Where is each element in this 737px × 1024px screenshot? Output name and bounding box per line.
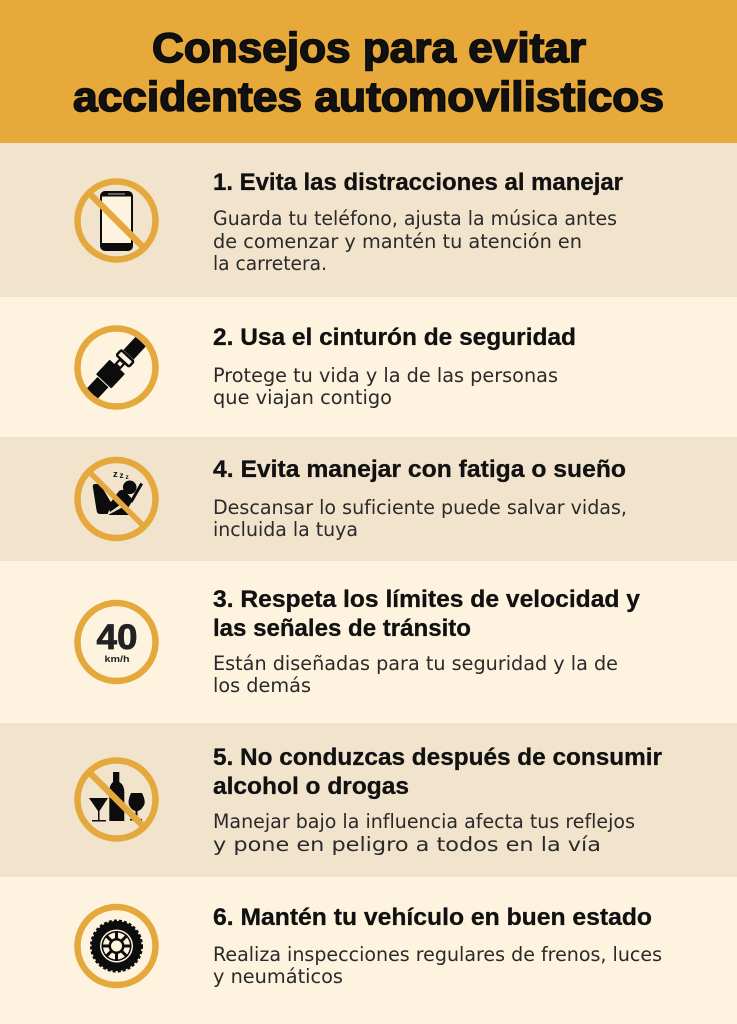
text: tip 3 body: Están diseñadas para tu seguridad y la de xyxy=(213,652,618,675)
text: tip 1 body: Guarda tu teléfono, ajusta la música antes xyxy=(213,207,617,230)
icon: tire xyxy=(78,907,156,985)
text: tip 5 body xyxy=(213,810,635,856)
text: tip 5 body: y pone en peligro a todos en la vía xyxy=(213,833,601,856)
text: tip 4 body: incluida la tuya xyxy=(213,518,358,541)
text: tip 2 body: que viajan contigo xyxy=(213,386,392,409)
icon: drowsy driver xyxy=(78,460,156,538)
text: tip 6 body: Realiza inspecciones regulares de frenos, luces xyxy=(213,943,662,966)
text: tip 4 body xyxy=(213,496,627,541)
heading: tip 5: alcohol o drogas xyxy=(213,773,409,800)
panel: tip 4 fatigue xyxy=(0,437,737,561)
heading: tip 4: 4. Evita manejar con fatiga o sueño xyxy=(213,456,626,483)
icon: drowsy driver: z xyxy=(126,474,130,481)
text: tip 6 body xyxy=(213,943,662,988)
icon: no phone xyxy=(78,182,156,260)
icon: no alcohol xyxy=(78,760,156,838)
panel: tip 3 speed limits xyxy=(0,561,737,723)
heading: tip 6: 6. Mantén tu vehículo en buen estado xyxy=(213,904,652,931)
icon: speed limit 40 xyxy=(78,603,156,681)
text: tip 1 body: la carretera. xyxy=(213,252,327,275)
heading: tip 5 xyxy=(213,744,662,800)
heading: tip 1: 1. Evita las distracciones al manejar xyxy=(213,169,623,196)
title banner: accidentes automovilisticos xyxy=(73,73,664,120)
heading: tip 3 xyxy=(213,586,641,642)
heading: tip 3: 3. Respeta los límites de velocidad y xyxy=(213,586,641,613)
icon: speed limit 40: 40 xyxy=(96,618,138,657)
heading: tip 2: 2. Usa el cinturón de seguridad xyxy=(213,324,576,351)
heading: tip 5: 5. No conduzcas después de consumir xyxy=(213,744,662,771)
panel: tip 2 seat belt xyxy=(0,297,737,437)
panel: tip 5 alcohol xyxy=(0,723,737,877)
panel: tip 6 vehicle maintenance xyxy=(0,877,737,1024)
icon: drowsy driver: z xyxy=(120,471,124,480)
icon: drowsy driver: z xyxy=(113,469,118,480)
icon: speed limit 40: km/h xyxy=(104,654,130,665)
text: tip 2 body: Protege tu vida y la de las personas xyxy=(213,364,558,387)
text: tip 1 body xyxy=(213,207,617,275)
text: tip 5 body: Manejar bajo la influencia afecta tus reflejos xyxy=(213,810,635,833)
title banner xyxy=(0,0,737,143)
heading: tip 3: las señales de tránsito xyxy=(213,615,471,642)
text: tip 4 body: Descansar lo suficiente puede salvar vidas, xyxy=(213,496,627,519)
text: tip 2 body xyxy=(213,364,558,409)
title banner: Consejos para evitar xyxy=(152,24,586,71)
icon: seat belt xyxy=(78,328,156,406)
text: tip 6 body: y neumáticos xyxy=(213,965,343,988)
text: tip 1 body: de comenzar y mantén tu atención en xyxy=(213,230,582,253)
text: tip 3 body: los demás xyxy=(213,674,311,697)
text: tip 3 body xyxy=(213,652,618,697)
panel: tip 1 distractions xyxy=(0,143,737,297)
